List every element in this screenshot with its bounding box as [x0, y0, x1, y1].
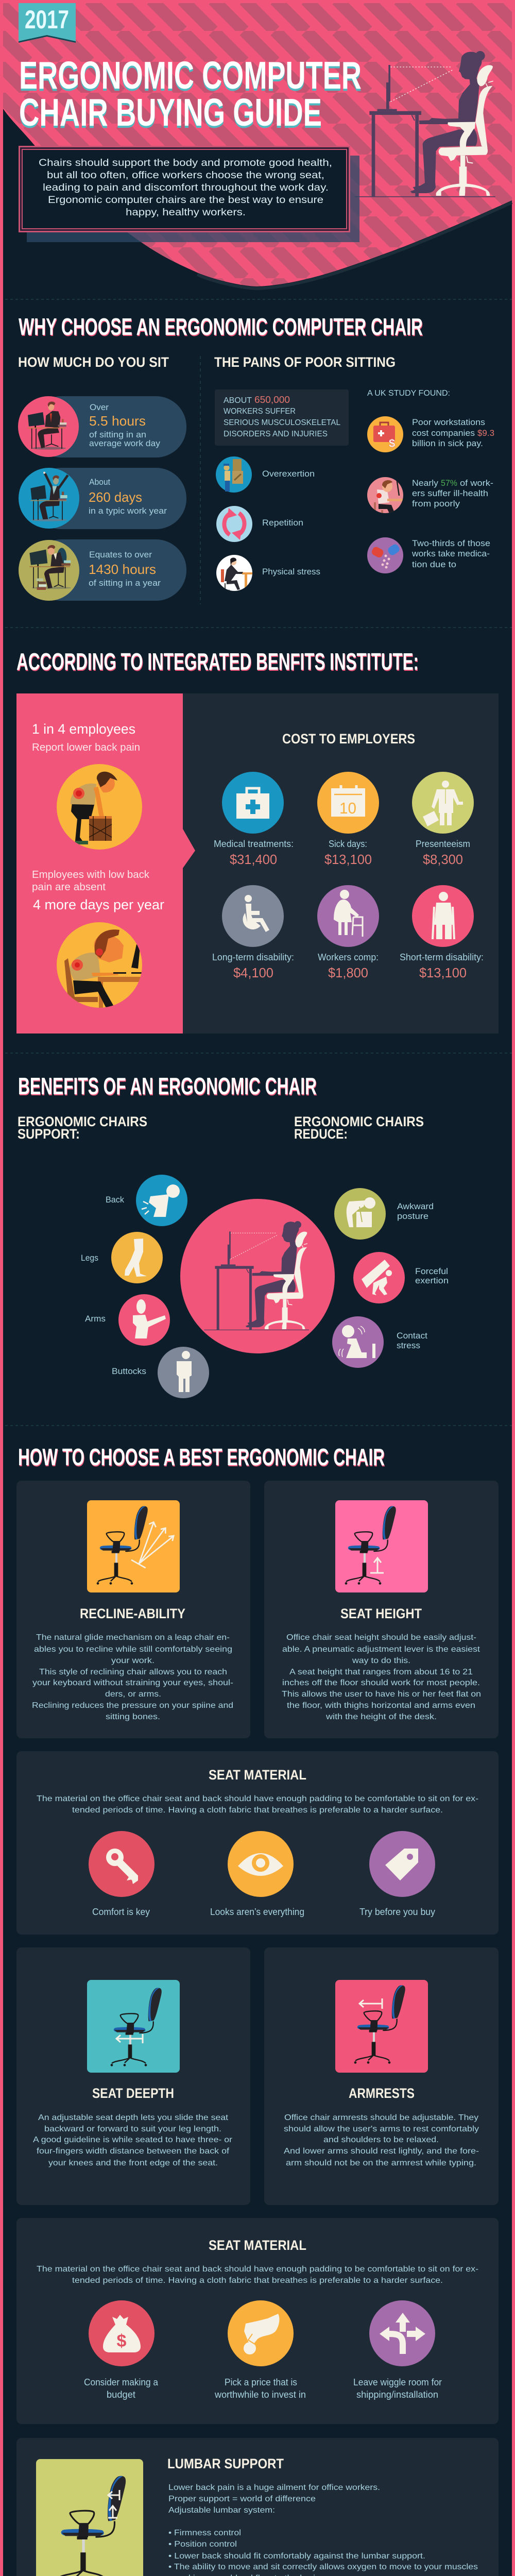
cost: long-term disability [212, 885, 294, 980]
stat pill: 5.5 hours: 5.5 hours [89, 413, 146, 429]
hero figure: woman at desk [355, 51, 495, 197]
card: lumbar support: • Firmness control [168, 2529, 241, 2537]
card: seat material: Try before you buy [359, 1907, 435, 1917]
panel: back pain facts [16, 693, 195, 1033]
cost: long-term disability: Long-term disability: [212, 952, 294, 962]
reduce: contact stress [332, 1316, 427, 1368]
card: seat height: inches off the floor should work for most people. [282, 1679, 480, 1687]
card: seat material budget [16, 2218, 499, 2424]
callout: 650,000 workers [215, 389, 349, 446]
cost: presenteeism: $8,300 [423, 852, 463, 867]
reduce: awkward posture: Awkward [397, 1201, 434, 1211]
reduce: forceful exertion: Forceful [415, 1266, 448, 1276]
icon: depth arrow [116, 2034, 143, 2043]
icon: overexertion [216, 456, 252, 493]
card: lumbar support: Adjustable lumbar system: [168, 2506, 275, 2515]
icon: direction arrows [369, 2300, 435, 2366]
card: armrests: ARMRESTS [349, 2086, 415, 2101]
panel: back pain facts: 4 more days per year [33, 897, 164, 912]
callout: 650,000 workers: DISORDERS AND INJURIES [224, 430, 328, 438]
stat text: sick pay: Poor workstations [412, 417, 485, 427]
card: seat depth: backward or forward to suit your leg length. [44, 2125, 221, 2133]
stat pill: 1430 hours [19, 539, 186, 601]
card: lumbar support: LUMBAR SUPPORT [167, 2456, 284, 2471]
card: recline-ability: RECLINE-ABILITY [80, 1606, 185, 1621]
card: seat material budget: Pick a price that is [225, 2377, 297, 2387]
icon: key [89, 1831, 154, 1897]
reduce: contact stress: stress [397, 1341, 420, 1350]
card: armrests: should allow the user's arms to rest comfortably [284, 2125, 479, 2133]
heading: how much do you sit: HOW MUCH DO YOU SIT [18, 354, 169, 370]
card: recline-ability: This style of reclining chair allows you to reach [39, 1668, 227, 1676]
intro text box: but all too often, office workers choose the wrong seat, [47, 170, 324, 181]
label: physical stress: Physical stress [262, 567, 320, 577]
subheading: chairs support: ERGONOMIC CHAIRS [18, 1114, 147, 1129]
card: seat material budget: Consider making a [84, 2377, 159, 2387]
label: repetition: Repetition [262, 518, 303, 528]
cost: medical treatments: Medical treatments: [214, 839, 294, 849]
year ribbon: 2017 [25, 5, 69, 34]
stat text: ill health: of work- [460, 478, 493, 488]
intro text box [19, 146, 359, 242]
cost: workers comp: Workers comp: [318, 952, 379, 962]
cost: workers comp [317, 885, 379, 980]
stat text: sick pay: cost companies [412, 428, 475, 438]
card: seat height [264, 1481, 499, 1738]
cost: long-term disability: $4,100 [233, 965, 273, 980]
cost: sick days: Sick days: [329, 839, 367, 849]
stat text: sick pay [412, 417, 494, 448]
card: armrests: and shoulders to be relaxed. [323, 2136, 439, 2144]
card: seat height: A seat height that ranges from about 16 to 21 [289, 1668, 473, 1676]
cost: workers comp: $1,800 [328, 965, 368, 980]
card: lumbar support: • The ability to move and sit correctly allows oxygen to move to your muscles [168, 2563, 478, 2571]
stat pill: 5.5 hours: of sitting in an [89, 430, 146, 439]
cost: short-term disability: $13,100 [419, 965, 467, 980]
card: recline-ability: sitting bones. [106, 1713, 160, 1721]
callout: 650,000 workers: 650,000 [254, 395, 290, 405]
card: recline-ability: The natural glide mechanism on a leap chair en- [36, 1633, 230, 1642]
panel: back pain facts: 1 in 4 employees [32, 721, 135, 737]
support: back: Back [106, 1195, 124, 1205]
stat pill: 1430 hours: 1430 hours [89, 562, 156, 577]
cost: medical treatments: $31,400 [230, 852, 277, 867]
reduce: forceful exertion: exertion [415, 1276, 449, 1285]
card: seat material budget: shipping/installation [356, 2389, 438, 2400]
card: lumbar support [16, 2438, 499, 2576]
card: lumbar support: Proper support = world of difference [168, 2495, 316, 2503]
support: legs: Legs [81, 1253, 98, 1263]
card: seat material budget: worthwhile to invest in [214, 2389, 306, 2400]
heading: pains of poor sitting: THE PAINS OF POOR SITTING [214, 354, 396, 370]
stat pill: 260 days: About [89, 477, 110, 487]
subheading: chairs reduce: ERGONOMIC CHAIRS [294, 1114, 424, 1129]
card: seat material: The material on the office chair seat and back should have enough padding to be comfortable to sit on for ex- [37, 1794, 478, 1803]
title: CHAIR BUYING GUIDE [19, 91, 322, 134]
heading: benefits: BENEFITS OF AN ERGONOMIC CHAIR [18, 1073, 317, 1099]
cost: presenteeism: Presenteeism [416, 839, 470, 849]
icon: pills [367, 537, 403, 573]
panel: back pain facts: Report lower back pain [32, 742, 140, 753]
intro text box: Ergonomic computer chairs are the best way to ensure [48, 195, 323, 206]
card: armrests: Office chair armrests should be adjustable. They [284, 2113, 478, 2122]
card: seat height: way to do this. [352, 1656, 410, 1665]
stat text: ill health: ers suffer ill-health [412, 488, 488, 498]
stat pill: 1430 hours: Equates to over [89, 550, 152, 560]
stat text: medication: Two-thirds of those [412, 538, 490, 548]
stat text: ill health: from poorly [412, 499, 460, 509]
icon: height arrow [370, 1558, 384, 1573]
cost: sick days: $13,100 [324, 852, 372, 867]
icon: price tag [369, 1831, 435, 1897]
icon: lumbar arrows [108, 2490, 119, 2518]
support: back [106, 1175, 187, 1226]
stat text: medication: works take medica- [411, 549, 490, 558]
card: recline-ability: Reclining reduces the pressure on your spiine and [32, 1701, 233, 1710]
icon: physical stress [216, 555, 252, 592]
callout: 650,000 workers: SERIOUS MUSCULOSKELETAL [224, 418, 340, 427]
stat pill: 260 days: 260 days [89, 489, 142, 505]
card: seat height: Office chair seat height should be easily adjust- [286, 1633, 476, 1642]
title [19, 54, 362, 134]
card: seat material budget: SEAT MATERIAL [209, 2238, 306, 2253]
support: buttocks [112, 1347, 209, 1398]
card: seat depth: SEAT DEEPTH [92, 2086, 174, 2101]
card: recline-ability: ders, or arms. [105, 1690, 161, 1699]
title: ERGONOMIC COMPUTER [19, 54, 362, 97]
card: seat height: the floor, with thighs horizontal and arms even [287, 1701, 475, 1710]
icon: armrest arrow [359, 1998, 382, 2009]
card: lumbar support: Lower back pain is a huge ailment for office workers. [168, 2483, 380, 2492]
cost: sick days: 10 [339, 799, 356, 817]
cost: short-term disability: Short-term disability: [400, 952, 484, 962]
subheading: chairs reduce: REDUCE: [294, 1126, 348, 1142]
card: seat material: tended periods of time. Having a cloth fabric that breathes is preferable to a harder surface. [72, 1806, 443, 1815]
reduce: forceful exertion [353, 1252, 449, 1303]
cost: short-term disability [400, 885, 484, 980]
support: arms [85, 1294, 170, 1346]
stat pill: 1430 hours: of sitting in a year [89, 578, 161, 588]
support: buttocks: Buttocks [112, 1366, 146, 1376]
cost: medical treatments [214, 772, 294, 867]
subheading: chairs support [18, 1114, 147, 1142]
callout: 650,000 workers: WORKERS SUFFER [224, 407, 296, 416]
icon: repetition [216, 506, 252, 542]
stat text: medication: tion due to [412, 560, 456, 569]
callout: 650,000 workers: ABOUT [224, 396, 252, 405]
icon: recline arrows [131, 1522, 174, 1568]
year ribbon [19, 3, 76, 43]
stat pill: 260 days: in a typic work year [89, 506, 167, 516]
reduce: awkward posture [334, 1188, 434, 1240]
stat text: sick pay: billion in sick pay. [412, 438, 483, 448]
cost: presenteeism [412, 772, 474, 867]
card: recline-ability: ables you to recline while still comfortably seeing [34, 1645, 232, 1654]
stat text: sick pay: $9.3 [477, 428, 494, 438]
card: seat material: Looks aren’s everything [210, 1907, 304, 1917]
heading: cost to employers: COST TO EMPLOYERS [282, 731, 415, 747]
central circle with seated woman [180, 1199, 335, 1353]
card: seat depth: your knees and the front edge of the seat. [48, 2159, 218, 2167]
card: recline-ability: your keyboard without straining your eyes, shoul- [32, 1679, 233, 1687]
icon: sick pay bag: $ [389, 437, 395, 450]
panel: back pain facts: Employees with low back [32, 869, 150, 880]
stat text: ill health [412, 478, 493, 509]
card: seat height: able. A pneumatic adjustment lever is the easiest [282, 1645, 480, 1654]
stat pill: 260 days [19, 468, 186, 529]
card: seat height: with the height of the desk. [325, 1713, 437, 1721]
icon: worker in pain [367, 477, 403, 515]
card: recline-ability [16, 1481, 250, 1738]
card: seat material [16, 1751, 499, 1935]
reduce: awkward posture: posture [397, 1211, 428, 1221]
card: seat material budget: budget [107, 2389, 135, 2400]
cost: sick days [317, 772, 379, 867]
intro text box: leading to pain and discomfort throughout the work day. [43, 182, 329, 193]
card: armrests [264, 1947, 499, 2205]
card: armrests: And lower arms should rest lightly, and the fore- [284, 2147, 479, 2156]
support: arms: Arms [85, 1314, 106, 1324]
icon: sick pay bag [367, 416, 403, 452]
subheading: chairs support: SUPPORT: [18, 1126, 80, 1142]
icon: eye [228, 1831, 294, 1897]
icon: money bag: $ [117, 2331, 127, 2351]
card: seat material: Comfort is key [92, 1907, 150, 1917]
stat text: ill health: Nearly [412, 478, 439, 488]
panel: back pain facts: pain are absent [32, 882, 106, 893]
card: armrests: arm should not be on the armrest while typing. [286, 2159, 476, 2167]
stat pill: 5.5 hours [18, 396, 186, 457]
card: seat depth: A good guideline is while seated to have three- or [33, 2136, 233, 2144]
panel: back pain and employer cost [16, 693, 499, 1033]
subheading: chairs reduce [294, 1114, 424, 1142]
icon: hand with coin [228, 2300, 294, 2366]
card: seat material: SEAT MATERIAL [209, 1767, 306, 1783]
intro text box: happy, healthy workers. [126, 207, 246, 218]
card: lumbar support: • Lower back should fit comfortably against the lumbar support. [168, 2552, 425, 2561]
card: seat material budget: The material on the office chair seat and back should have enough padding to be comfortable to sit on for ex- [37, 2265, 478, 2274]
stat pill: 5.5 hours: average work day [89, 438, 161, 448]
card: seat height: This allows the user to have his or her feet flat on [282, 1690, 481, 1699]
icon: office chair [97, 1506, 148, 1585]
reduce: contact stress: Contact [397, 1331, 427, 1341]
intro text box: Chairs should support the body and promote good health, [39, 158, 332, 168]
stat pill: 5.5 hours: Over [90, 402, 109, 412]
card: seat depth [16, 1947, 250, 2205]
card: lumbar support: • Position control [168, 2540, 237, 2549]
label: overexertion: Overexertion [262, 469, 315, 479]
label: uk study: A UK STUDY FOUND: [367, 389, 450, 398]
card: seat height: SEAT HEIGHT [340, 1606, 422, 1621]
card: seat depth: An adjustable seat depth lets you slide the seat [38, 2113, 229, 2122]
card: seat material budget: tended periods of time. Having a cloth fabric that breathes is preferable to a harder surface. [72, 2276, 443, 2285]
icon: money bag [89, 2300, 154, 2366]
card: seat material budget: Leave wiggle room for [353, 2377, 442, 2387]
stat text: medication [411, 538, 490, 569]
stat text: ill health: 57% [441, 478, 457, 488]
card: seat depth: four-fingers width distance between the back of [37, 2147, 230, 2156]
hero background [3, 3, 512, 304]
card: recline-ability: your work. [111, 1656, 154, 1665]
support: legs [81, 1232, 163, 1283]
